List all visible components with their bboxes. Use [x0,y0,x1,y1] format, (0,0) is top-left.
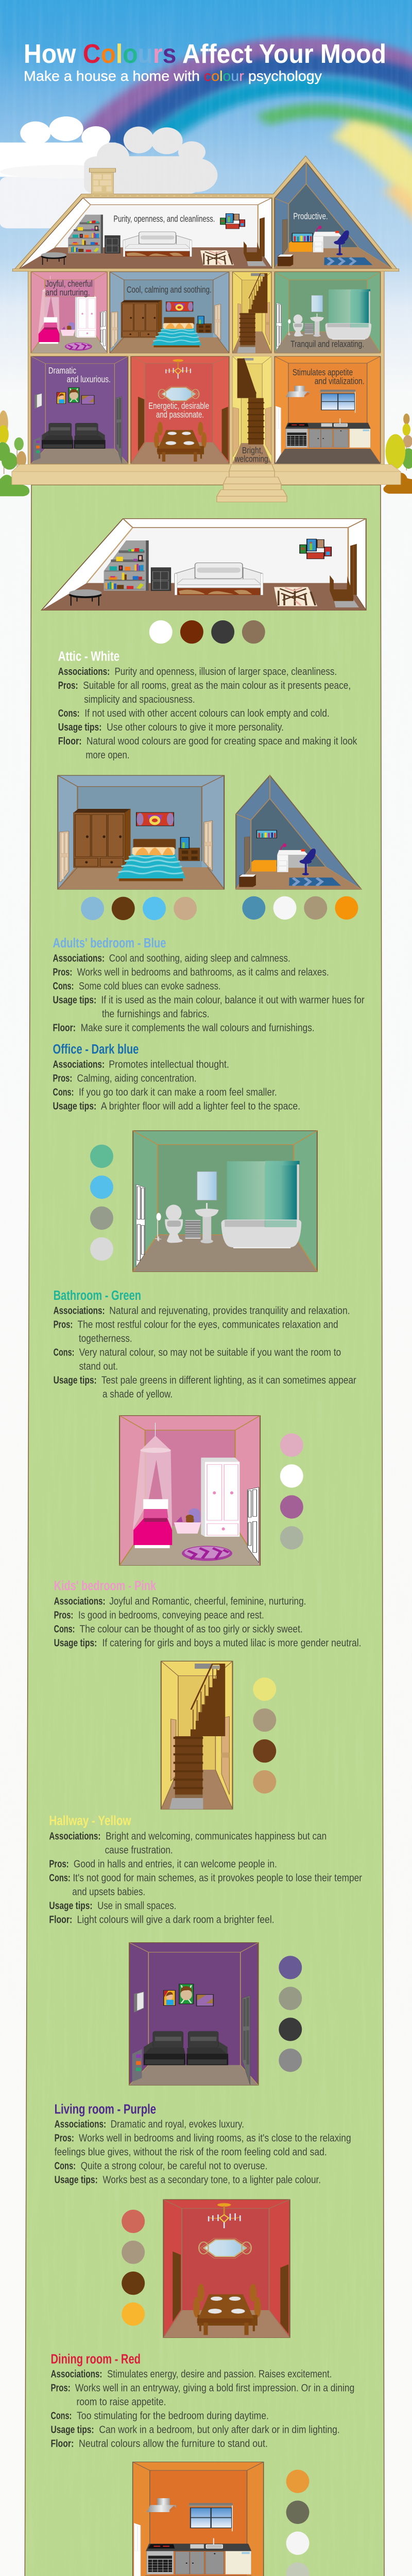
panel: bathroom text and kids bedroom [54,1289,356,1565]
office swatches [242,896,358,920]
dining room text: Usage tips: [50,2425,94,2435]
room: attic white [20,198,272,268]
bathroom heading: Bathroom - Green [54,1289,141,1303]
panel: hallway text and living room [49,1814,362,2085]
rainbow [89,46,412,222]
room: kitchen [274,357,381,464]
kids bedroom text: Pros: [54,1609,73,1621]
caption: kids bedroom: Joyful, cheerful [45,279,93,289]
kids bedroom text: Associations: [54,1596,106,1607]
office text [53,1059,300,1112]
living room text: Dramatic and royal, evokes luxury. [111,2119,244,2130]
living room text: Pros: [55,2133,74,2144]
caption: dining room [148,401,209,419]
room: living [31,357,128,464]
kids bedroom swatches [280,1433,303,1550]
hallway illustration [161,1661,233,1809]
living room text: Usage tips: [55,2175,98,2185]
panel: office text and bathroom [53,1042,317,1272]
adults bedroom illustration [58,775,224,889]
living room illustration [129,1943,259,2085]
room: upper hallway [233,272,271,353]
attic text: Associations: [58,666,110,677]
room: bathroom [274,272,381,353]
attic text [58,666,357,761]
title: How Colours Affect Your Mood [24,39,386,69]
bathroom text: a shade of yellow. [102,1388,173,1400]
dining room text: Too stimulating for the bedroom during daytime. [77,2411,269,2421]
panel: kids text and hallway [54,1579,362,1809]
kitchen swatches [286,2470,310,2576]
adults bedroom text: Some cold blues can evoke sadness. [79,981,221,992]
porch steps [217,465,287,502]
dining room swatches [122,2210,145,2326]
hallway text: cause frustration. [105,1844,173,1856]
dining room text: Associations: [50,2369,102,2380]
room captions on house: Purity, openness, and cleanliness. [113,214,215,224]
hallway text [49,1831,362,1925]
dining room illustration [163,2199,290,2337]
adults bedroom text: Floor: [53,1023,76,1033]
dining room text: Pros: [50,2383,71,2394]
house roof frame [12,156,399,272]
cloud: pale rear [0,166,95,228]
panel: dining text and kitchen [50,2352,354,2576]
dining room text: Cons: [50,2411,72,2421]
living room text: Associations: [55,2119,106,2130]
panel: adults bedroom and office [53,775,365,1033]
hallway text: Associations: [49,1831,100,1842]
caption: adults bedroom: Cool, calming and soothing. [127,285,212,295]
house body [12,269,401,502]
cloud: grey [84,127,217,194]
caption: living room: Dramatic [48,366,76,376]
room: adults bedroom [110,272,229,353]
attic text: Cons: [58,708,80,719]
bathroom text: Cons: [54,1347,74,1358]
trees and bushes left of house [0,411,29,496]
caption: dining room: Energetic, desirable [148,401,209,411]
adults bedroom text: the furnishings and fabrics. [102,1009,210,1020]
hallway text: Use in small spaces. [97,1900,176,1911]
panel: living room text and dining room [55,2102,351,2337]
adults bedroom text [53,953,365,1033]
house illustration [12,156,401,502]
hallway heading: Hallway - Yellow [49,1814,131,1828]
kitchen illustration [133,2462,264,2576]
kids bedroom text: Cons: [54,1623,75,1635]
dining room text: Floor: [50,2438,74,2449]
bathroom swatches [90,1145,113,1261]
office text: Calming, aiding concentration. [77,1073,197,1084]
caption: living room: and luxurious. [67,375,111,384]
office text: Usage tips: [53,1101,96,1112]
room: office dark blue [274,162,391,268]
hallway text: Cons: [49,1872,71,1884]
bathroom text: stand out. [79,1361,118,1372]
caption: office: Productive. [293,211,328,221]
caption: living room [48,366,111,384]
living room swatches [279,1956,302,2072]
office text: Associations: [53,1059,105,1070]
kids bedroom caption backdrop [45,280,94,297]
attic text: Use other colours to give it more personality. [107,722,284,733]
dining room text: Neutral colours allow the furniture to stand out. [79,2438,268,2449]
bathroom text [54,1305,356,1400]
clouds [0,116,217,228]
attic swatches [149,620,265,643]
office illustration [236,775,362,889]
hallway text: Light colours will give a dark room a brighter feel. [77,1914,274,1925]
kids bedroom text [54,1596,362,1649]
hallway text: Pros: [49,1858,69,1870]
hallway text: and upsets babies. [72,1886,145,1897]
caption: hallway: welcoming. [234,454,270,464]
adults bedroom text: Usage tips: [53,995,96,1006]
office text: Promotes intellectual thought. [109,1059,229,1070]
office text: Pros: [53,1073,72,1084]
dining room text: room to raise appetite. [76,2397,166,2408]
living room text [55,2119,351,2185]
attic heading: Attic - White [58,649,119,664]
living room text: Quite a strong colour, be careful not to overuse. [81,2161,267,2172]
hallway text: Usage tips: [49,1900,93,1911]
caption: kitchen: and vitalization. [315,376,365,386]
chimney [89,168,115,194]
porch [12,465,401,485]
hallway swatches [253,1677,276,1793]
room: lower hallway [233,357,271,464]
kids bedroom illustration [119,1416,260,1565]
room: dining [131,357,229,464]
attic text: simplicity and spaciousness. [84,694,195,705]
caption: dining room: and passionate. [156,410,204,419]
room: kids bedroom [31,272,107,353]
attic illustration [42,519,366,610]
bathroom text: Usage tips: [54,1375,97,1386]
caption: kitchen [293,367,365,386]
caption: kids bedroom [45,279,93,297]
dining room heading: Dining room - Red [50,2352,141,2367]
bathroom text: Associations: [54,1305,105,1316]
kids bedroom text: Usage tips: [54,1637,97,1649]
green lawn panel [24,485,385,2576]
bathroom text: togetherness. [79,1333,132,1344]
cloud: white [0,116,126,179]
caption: hallway [234,445,270,464]
attic text: Floor: [58,736,82,747]
caption: kitchen: Stimulates appetite [293,367,353,377]
subtitle: Make a house a home with colour psychology [24,68,322,84]
office text: Cons: [53,1087,74,1098]
adults bedroom text: Pros: [53,967,72,978]
kids bedroom text: Is good in bedrooms, conveying peace and rest. [78,1609,264,1621]
dining room text [50,2369,354,2449]
hallway text: Floor: [49,1914,72,1925]
caption: kids bedroom: and nurturing. [45,287,90,297]
attic text: Usage tips: [58,722,101,733]
bathroom illustration [133,1131,317,1272]
attic text: more open. [85,750,130,761]
caption: hallway: Bright, [242,445,263,455]
bathroom text: Pros: [54,1319,73,1330]
adults bedroom swatches [81,897,197,920]
living room text: Cons: [55,2161,76,2172]
adults bedroom text: Cons: [53,981,74,992]
living room heading: Living room - Purple [55,2102,156,2117]
attic text: Pros: [58,680,78,691]
panel: attic detail [42,519,366,761]
adults bedroom heading: Adults' bedroom - Blue [53,936,166,951]
trees and bushes right of house [383,414,412,494]
kids bedroom heading: Kids' bedroom - Pink [54,1579,156,1594]
office heading: Office - Dark blue [53,1042,139,1057]
adults bedroom text: Associations: [53,953,105,964]
